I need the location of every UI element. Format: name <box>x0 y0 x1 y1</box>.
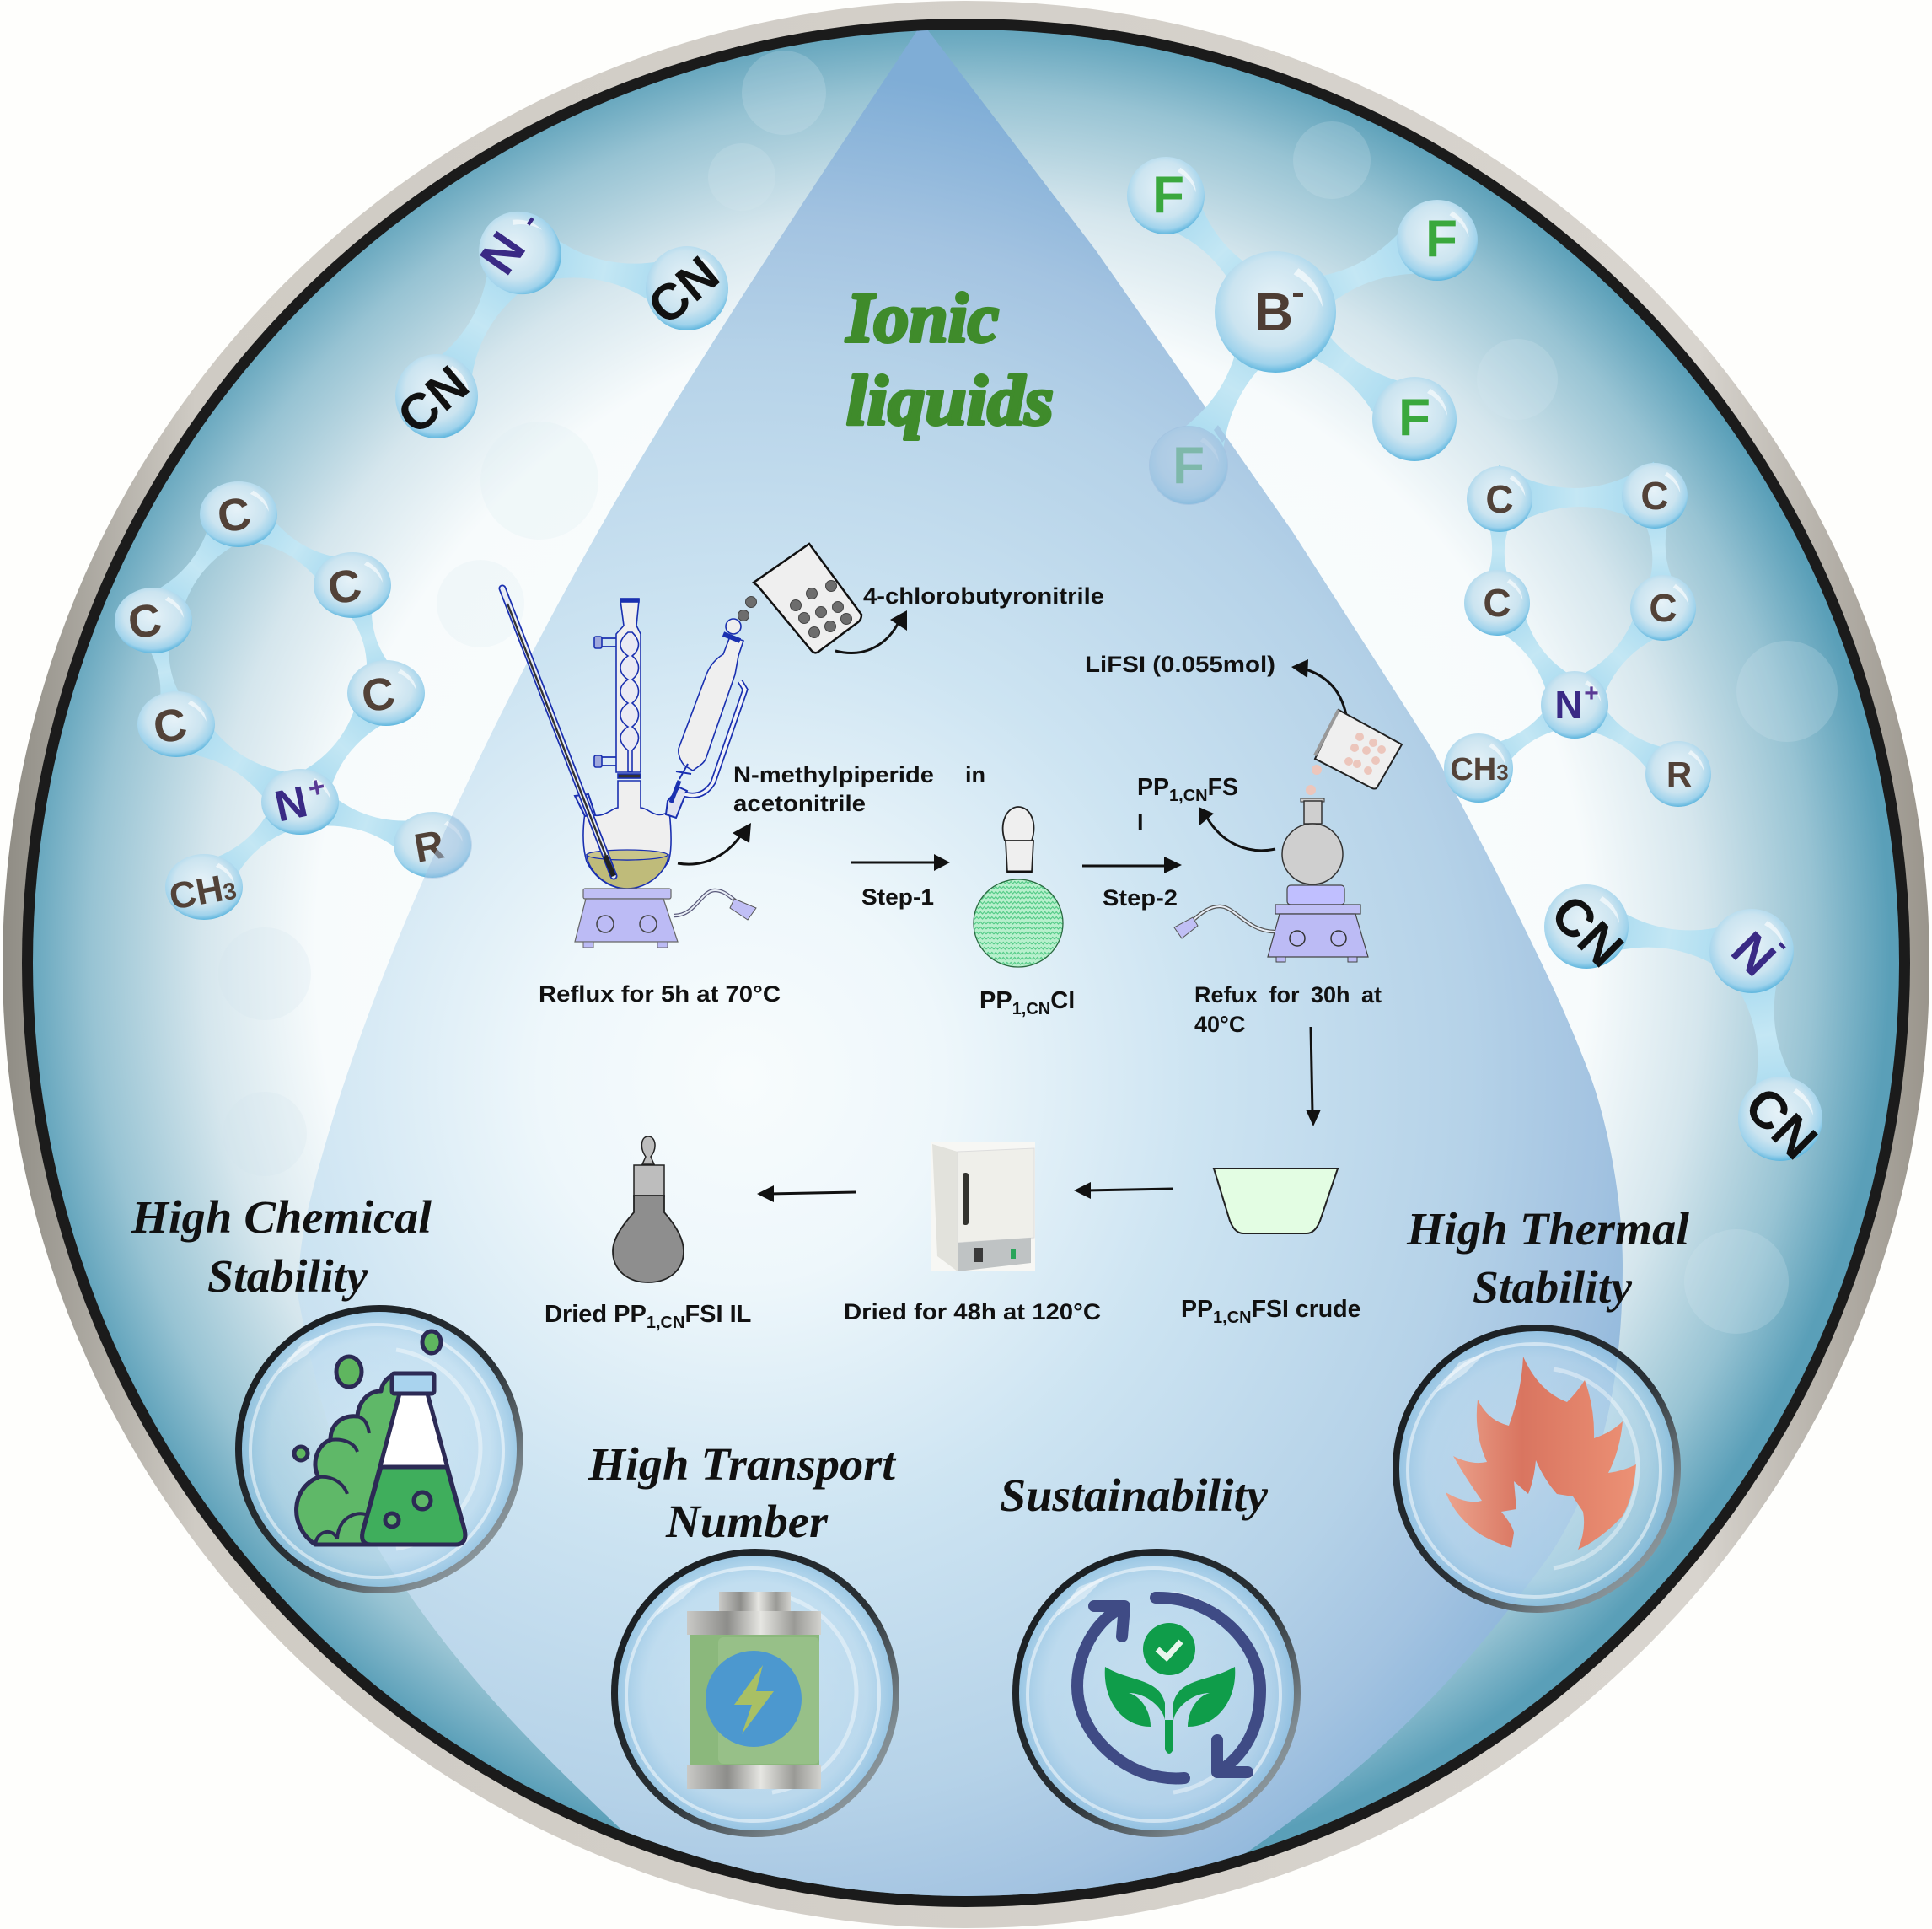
molecule: left cation ring: C <box>357 667 399 723</box>
label: N-methylpiperide in acetonitrile: acetonitrile <box>733 791 866 816</box>
label: PP1,CNFSI: I <box>1137 809 1144 835</box>
label: crude: 1,CN <box>1213 1308 1252 1327</box>
beaker pouring LiFSI <box>1306 710 1402 795</box>
label: dried IL: 1,CN <box>647 1314 684 1332</box>
heading: high chemical stability: Stability <box>207 1250 368 1302</box>
heading: high chemical stability <box>131 1191 432 1302</box>
label: crude: FSI crude <box>1252 1296 1360 1323</box>
label: reflux 30h: Refux for 30h at <box>1194 982 1382 1007</box>
molecule: left cation ring: C <box>149 698 191 754</box>
molecule: dicyanamide right: - <box>1768 930 1798 959</box>
molecule: left cation ring: C <box>124 594 165 649</box>
molecule: right cation ring: R <box>1666 755 1692 794</box>
tint where R atom passes under drop <box>424 816 472 879</box>
molecule: BF4 anion: B <box>1254 282 1293 342</box>
label: reflux 30h <box>1194 982 1382 1037</box>
arrow: down to crucible <box>1306 1027 1321 1126</box>
label: reflux: Reflux for 5h at 70°C <box>539 981 781 1007</box>
label: step 2: Step-2 <box>1103 885 1178 911</box>
heading: high chemical stability: High Chemical <box>131 1191 432 1243</box>
label: PP1,CNFSI <box>1137 774 1238 835</box>
icon: flask and cloud <box>294 1331 465 1545</box>
molecule: left cation ring: N <box>271 777 312 832</box>
label: PP1,CNFSI: PP <box>1137 774 1169 801</box>
label: PP1,CNCl: 1,CN <box>1012 1000 1050 1018</box>
title: Ionic <box>845 279 999 357</box>
molecule: right cation ring: C <box>1649 586 1677 630</box>
orb: thermal stability icon <box>1395 1327 1678 1610</box>
orb: chemical stability icon <box>238 1308 521 1591</box>
drying oven <box>931 1142 1035 1271</box>
molecule: dicyanamide top left <box>387 195 730 445</box>
title <box>845 279 1054 440</box>
molecule: dicyanamide right: CN <box>1733 1076 1828 1171</box>
label: step 1: Step-1 <box>861 884 934 910</box>
molecule: left cation ring: R <box>411 823 448 872</box>
crucible bowl <box>1214 1169 1338 1233</box>
heading: high transport number: High Transport <box>588 1438 897 1490</box>
reflux apparatus <box>502 588 756 948</box>
arrow: oven to flask <box>757 1185 856 1202</box>
molecule: dicyanamide top left: CN <box>387 355 480 445</box>
heading: high transport number: Number <box>665 1496 829 1547</box>
molecule: left cation ring: C <box>324 559 365 615</box>
label: PP1,CNFSI: 1,CN <box>1169 787 1208 805</box>
arrow: crucible to oven <box>1074 1182 1173 1199</box>
molecule: right cation ring: + <box>1584 680 1599 707</box>
molecule: dicyanamide top left: CN <box>637 245 730 336</box>
molecule: left cation ring: CH3 <box>166 866 239 918</box>
condenser <box>594 599 641 778</box>
label: reflux 30h: 40°C <box>1194 1012 1245 1037</box>
curved arrow to N-methylpiperide <box>678 823 751 864</box>
label: dried IL: Dried PP <box>545 1301 647 1328</box>
molecule: right cation ring <box>1444 462 1711 807</box>
icon: recycling plant <box>1077 1598 1260 1778</box>
beaker pouring 4-chlorobutyronitrile <box>738 544 861 653</box>
molecule: left cation ring <box>115 481 471 920</box>
heading: high transport number <box>588 1438 897 1547</box>
molecule: BF4 anion: F <box>1152 166 1184 224</box>
round flask and hot plate (step 2) <box>1174 798 1368 962</box>
molecule: dicyanamide top left: - <box>512 206 545 234</box>
molecule: right cation ring: C <box>1483 581 1511 625</box>
molecule: right cation ring: N <box>1554 683 1583 727</box>
heading: high thermal stability: Stability <box>1473 1261 1633 1313</box>
label: crude: PP <box>1181 1296 1213 1323</box>
dropping funnel <box>671 619 745 803</box>
curved arrow to PP1,CNFSI <box>1199 807 1275 851</box>
faint background molecules <box>709 51 1838 1334</box>
thermometer <box>502 588 614 876</box>
dried flask <box>613 1136 684 1282</box>
molecule: BF4 anion: F <box>1425 210 1457 268</box>
curved arrow to LiFSI <box>1291 659 1346 715</box>
title: liquids <box>846 362 1054 440</box>
molecule: left cation ring: C <box>213 487 255 543</box>
icon: flame <box>1446 1357 1636 1550</box>
liquid drop shape <box>298 23 1623 1929</box>
molecule: dicyanamide right <box>1539 884 1828 1171</box>
three-neck flask <box>575 781 687 889</box>
label: dried IL: FSI IL <box>684 1301 751 1328</box>
molecule: dicyanamide right: N <box>1720 921 1787 987</box>
heading: sustainability: Sustainability <box>1000 1470 1269 1521</box>
heading: high thermal stability: High Thermal <box>1406 1203 1690 1255</box>
curved arrow to 4-chlorobutyronitrile <box>835 610 907 653</box>
molecule: right cation ring: CH3 <box>1450 752 1509 787</box>
molecule: BF4 anion: F <box>1398 389 1430 447</box>
orb: transport number icon <box>614 1551 897 1835</box>
molecule: dicyanamide top left: N <box>469 222 536 284</box>
molecule: left cation ring: + <box>305 771 328 805</box>
arrow: step 2 <box>1082 857 1182 873</box>
label: LiFSI: LiFSI (0.055mol) <box>1085 652 1275 677</box>
molecule: dicyanamide right: CN <box>1539 884 1634 979</box>
arrow: step 1 <box>851 854 950 871</box>
orb: sustainability icon <box>1015 1551 1298 1835</box>
hot plate with cord <box>575 889 756 948</box>
label: PP1,CNCl: Cl <box>1050 987 1075 1014</box>
label: 4-chlorobutyronitrile: 4-chlorobutyronitrile <box>863 583 1104 609</box>
flask: PP1,CNCl <box>974 807 1063 967</box>
molecule: right cation ring: C <box>1485 477 1514 521</box>
tint where F atom passes under drop <box>1149 425 1228 505</box>
molecule: right cation ring: C <box>1640 474 1669 518</box>
label: N-methylpiperide in acetonitrile: N-methylpiperide <box>733 762 934 787</box>
label: PP1,CNCl: PP <box>979 987 1012 1014</box>
molecule: BF4 anion <box>1127 157 1478 504</box>
label: N-methylpiperide in acetonitrile: in <box>965 762 985 787</box>
icon: battery <box>687 1592 821 1789</box>
label: PP1,CNFSI: FS <box>1208 774 1238 801</box>
heading: high thermal stability <box>1406 1203 1690 1313</box>
molecule: BF4 anion: F <box>1173 437 1205 495</box>
label: dried for 48h: Dried for 48h at 120°C <box>844 1299 1101 1325</box>
label: N-methylpiperide in acetonitrile <box>733 762 985 816</box>
